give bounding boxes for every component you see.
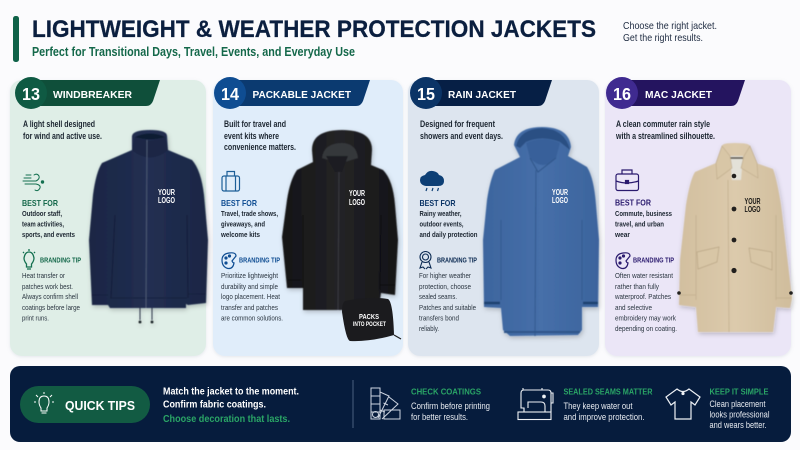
header tagline: Choose the right jacket. [623,20,717,32]
logo placeholder: LOGO [552,196,568,205]
quick tips pill: QUICK TIPS [65,398,135,413]
packed pouch [342,298,401,341]
best for: BEST FOR [615,198,651,208]
check coatings: CHECK COATINGS [411,386,481,396]
jacket: blue rain jacket [483,127,599,336]
branding tip: BRANDING TIP [40,258,81,264]
icon: sewing machine [518,388,553,420]
jacket: beige mac [679,143,792,332]
header ribbon: rain: RAIN JACKET [448,89,517,101]
description: event kits where [224,131,279,141]
header ribbon: rain [410,77,552,109]
logo placeholder: LOGO [349,198,365,207]
branding text: durability and simple [221,282,278,291]
branding tip: BRANDING TIP [437,258,477,264]
branding text: transfers bond [419,314,459,322]
tips summary: Match the jacket to the moment. [163,386,299,398]
logo placeholder: LOGO [744,205,760,214]
logo placeholder: YOUR [552,188,568,197]
branding text: patches work best. [22,282,73,291]
description: A clean commuter rain style [616,119,710,129]
header ribbon: rain: 15 [417,84,435,104]
sealed seams [564,386,652,422]
header ribbon: mac: 16 [613,84,631,104]
description [224,119,296,152]
branding tip: BRANDING TIP [633,258,674,264]
header ribbon: windbreaker [15,77,160,109]
branding text: depending on coating. [615,324,677,333]
logo placeholder: LOGO [158,196,175,205]
subtitle: Perfect for Transitional Days, Travel, Events, and Everyday Use [32,45,355,59]
best for: BEST FOR [221,198,257,208]
branding text [419,271,476,333]
best for: team activities, [22,220,64,228]
icon: palette [222,253,236,269]
panel: rain jacket [408,77,599,356]
panel: packable jacket [213,77,403,356]
branding text: and selective [615,303,652,312]
header ribbon: windbreaker: WINDBREAKER [53,89,132,101]
branding text: Often water resistant [615,271,673,280]
logo placeholder [744,197,761,214]
branding text: protection, choose [419,282,471,291]
description [23,119,102,141]
tips summary: Confirm fabric coatings. [163,400,266,410]
best for: Travel, trade shows, [221,209,278,218]
logo placeholder [552,188,568,205]
best for: outdoor events, [420,220,464,228]
sealed seams: SEALED SEAMS MATTER [564,386,652,396]
keep it simple: Clean placement [710,399,766,409]
branding text: print runs. [22,314,49,322]
check coatings: Confirm before printing [411,401,490,411]
best for [420,198,478,239]
branding text: Prioritize lightweight [221,271,278,280]
logo placeholder [349,189,365,207]
header tagline: Get the right results. [623,32,703,44]
branding text [614,271,677,333]
title accent bar [13,16,19,62]
branding text: sealed seams. [419,292,457,301]
jacket: navy windbreaker [89,130,208,323]
tips summary [163,386,299,425]
sealed seams: and improve protection. [564,412,644,422]
icon: palette [616,253,630,269]
description: convenience matters. [224,142,296,152]
panel: quick tips bar [10,366,791,442]
branding text: reliably. [419,324,439,333]
description: with a streamlined silhouette. [615,131,715,141]
tips summary: Choose decoration that lasts. [163,414,290,425]
description: Built for travel and [224,119,286,129]
keep it simple: looks professional [710,410,770,420]
logo placeholder: YOUR [349,189,365,198]
header ribbon: mac: MAC JACKET [645,89,713,101]
icon: bulb [34,392,54,413]
description [615,119,715,141]
logo placeholder: YOUR [158,188,175,197]
coat buttons [677,174,793,295]
description: for wind and active use. [23,131,102,141]
title: LIGHTWEIGHT & WEATHER PROTECTION JACKETS [32,16,596,43]
branding text [22,271,80,322]
best for: sports, and events [22,230,75,239]
sealed seams: They keep water out [564,401,633,411]
description: showers and event days. [420,131,503,141]
best for [614,198,672,239]
description: Designed for frequent [420,119,495,129]
header ribbon: windbreaker: 13 [22,84,40,104]
icon: t-shirt [666,389,700,419]
best for [220,198,278,239]
check coatings: for better results. [411,412,468,422]
panel: windbreaker [10,77,208,356]
description [420,119,503,141]
header ribbon: mac [606,77,745,109]
branding text: coatings before large [22,303,80,312]
icon: lightbulb [23,249,35,269]
best for [22,198,75,239]
best for: wear [614,230,630,239]
branding text: embroidery may work [615,314,676,322]
icon: award ribbon [420,252,431,269]
best for: Commute, business [615,209,672,218]
best for: giveaways, and [221,220,265,228]
branding text: are common solutions. [221,314,283,322]
quick tips pill [20,386,150,423]
branding text: logo placement. Heat [221,292,280,301]
icon: swatch fan [371,388,400,419]
best for: Rainy weather, [420,209,462,218]
best for: BEST FOR [420,198,456,208]
packed pouch: PACKS [359,314,379,321]
branding text: rather than fully [615,282,659,291]
check coatings [411,386,490,422]
branding text: Always confirm shell [22,292,78,301]
logo placeholder: YOUR [744,197,761,206]
keep it simple [710,386,770,430]
best for: Outdoor staff, [22,209,62,218]
header ribbon: packable: 14 [221,84,239,104]
icon: rain cloud [420,171,444,191]
header ribbon: packable [214,77,370,109]
icon: luggage [222,172,240,191]
branding text: Heat transfer or [22,271,65,280]
keep it simple: and wears better. [710,420,766,430]
header ribbon: packable: PACKABLE JACKET [252,89,352,101]
header tagline [623,20,717,44]
best for: travel, and urban [615,220,664,228]
branding tip: BRANDING TIP [239,258,280,264]
branding text: transfer and patches [221,303,278,312]
jacket: black packable [282,130,398,310]
packed pouch: INTO POCKET [353,322,386,328]
description: A light shell designed [23,119,95,129]
best for: BEST FOR [22,198,58,208]
branding text: Patches and suitable [419,303,476,312]
best for: welcome kits [220,230,260,239]
keep it simple: KEEP IT SIMPLE [710,386,769,396]
logo placeholder [158,188,175,205]
icon: wind [23,174,44,191]
branding text: For higher weather [419,271,471,280]
panel: mac jacket [605,77,793,356]
branding text: waterproof. Patches [614,292,671,301]
icon: briefcase [616,170,638,190]
branding text [221,271,283,322]
best for: and daily protection [420,230,478,239]
